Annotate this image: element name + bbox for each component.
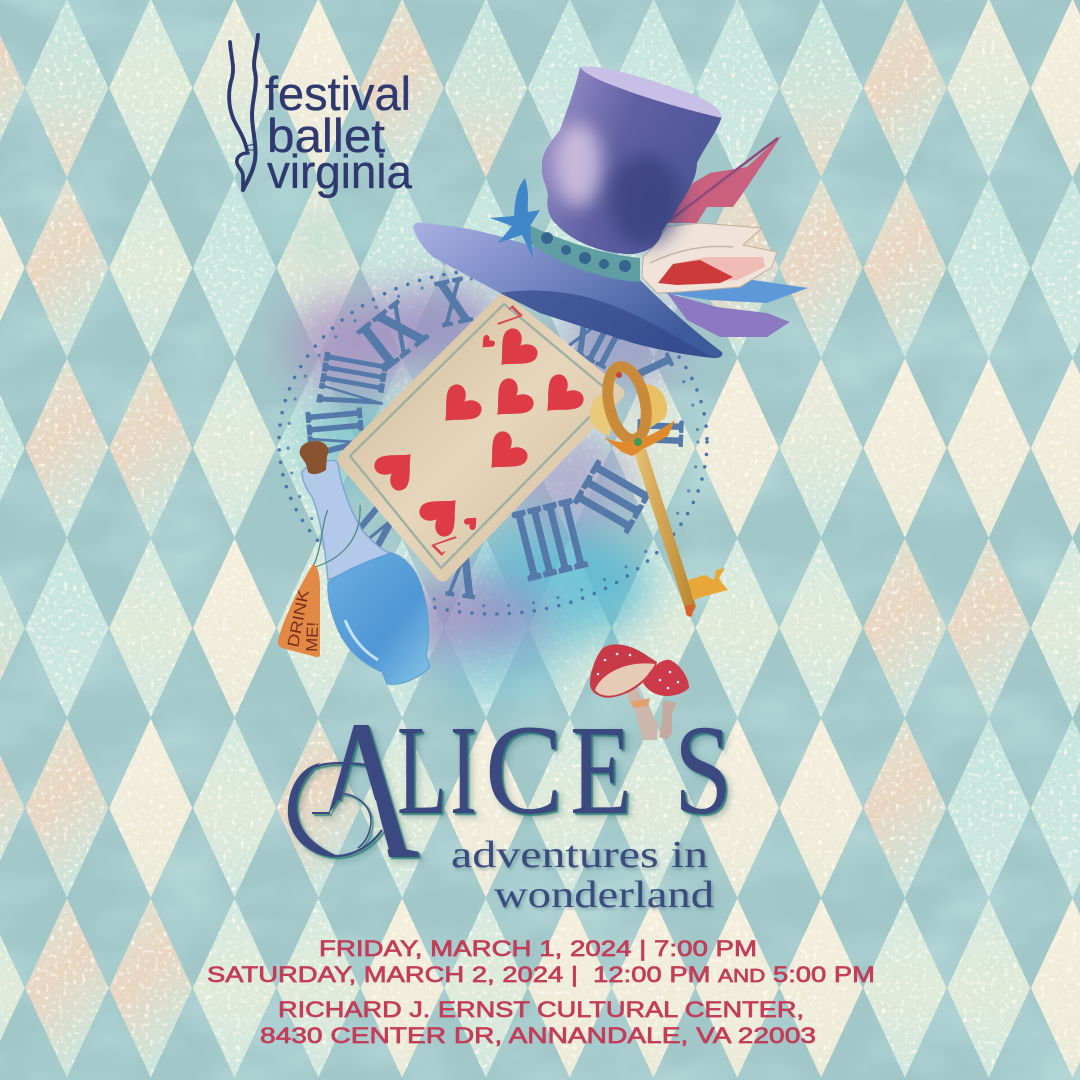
clock: roman numerals: III bbox=[554, 448, 673, 547]
bottle glass bbox=[302, 460, 391, 580]
clock: roman numerals: VII bbox=[287, 405, 384, 461]
logo: festival ballet virginia: ballet bbox=[267, 109, 385, 162]
logo: festival ballet virginia: virginia bbox=[267, 145, 413, 198]
subtitle: adventures in wonderland bbox=[451, 834, 714, 916]
clock: roman numerals: XII bbox=[558, 304, 628, 380]
mushroom stems bbox=[625, 678, 658, 740]
bottle liquid bbox=[328, 553, 430, 684]
clock: roman numerals: II bbox=[623, 418, 699, 448]
title: Alice's: C bbox=[485, 699, 563, 841]
title: Alice's: L bbox=[397, 699, 447, 841]
clock: roman numerals bbox=[287, 261, 699, 614]
hat bow bbox=[490, 178, 540, 258]
hat brim bbox=[413, 222, 722, 358]
clock: roman numerals: VIII bbox=[294, 347, 409, 417]
clock: dotted ring bbox=[279, 270, 707, 614]
hat crown bbox=[542, 67, 722, 254]
playing card: seven of hearts bbox=[338, 294, 624, 582]
tag: drink me: DRINK bbox=[285, 588, 313, 649]
clock: roman numerals: X bbox=[429, 261, 477, 341]
hat band bbox=[527, 224, 640, 282]
cork bbox=[300, 441, 328, 474]
event dates and venue: RICHARD J. ERNST CULTURAL CENTER, bbox=[278, 997, 804, 1022]
title: Alice's: I bbox=[450, 699, 477, 841]
logo: dancer legs bbox=[229, 35, 258, 190]
bottle bbox=[278, 441, 430, 684]
title: Alice's: E bbox=[570, 699, 632, 841]
logo: festival ballet virginia: festival bbox=[265, 67, 411, 120]
clock: roman numerals: V bbox=[443, 533, 483, 614]
big mushroom cap bbox=[590, 644, 657, 698]
title: Alice's bbox=[288, 725, 734, 865]
hat bbox=[413, 67, 808, 358]
subtitle: adventures in wonderland: wonderland bbox=[494, 874, 714, 916]
mushrooms bbox=[590, 644, 689, 740]
title: Alice's: S bbox=[674, 699, 732, 841]
card index numbers: 7 bbox=[488, 297, 530, 339]
subtitle: adventures in wonderland: adventures in bbox=[451, 834, 708, 876]
event dates and venue: SATURDAY, MARCH 2, 2024 | 12:00 PM AND 5:00 PM bbox=[207, 962, 875, 987]
logo: festival ballet virginia bbox=[229, 35, 413, 198]
clock: roman numerals: I bbox=[620, 346, 686, 388]
hat feathers and rabbit ear bbox=[642, 135, 808, 337]
title: Alice's: A bbox=[305, 680, 420, 901]
small mushroom cap bbox=[643, 660, 689, 696]
watercolor wash behind the clock bbox=[286, 207, 680, 698]
clock: roman numerals: VI bbox=[329, 487, 416, 580]
string bbox=[312, 505, 360, 568]
event dates and venue: FRIDAY, MARCH 1, 2024 | 7:00 PM bbox=[319, 936, 757, 961]
tag: drink me: ME! bbox=[304, 622, 322, 652]
clock: roman numerals: IX bbox=[345, 285, 440, 384]
event dates and venue: 8430 CENTER DR, ANNANDALE, VA 22003 bbox=[260, 1023, 816, 1048]
key bbox=[590, 363, 728, 617]
card hearts bbox=[371, 325, 587, 540]
event dates and venue bbox=[207, 936, 875, 1048]
clock: roman numerals: IIII bbox=[505, 476, 595, 605]
tag: drink me bbox=[278, 564, 322, 657]
playing card: seven of hearts: 7 bbox=[424, 522, 466, 564]
